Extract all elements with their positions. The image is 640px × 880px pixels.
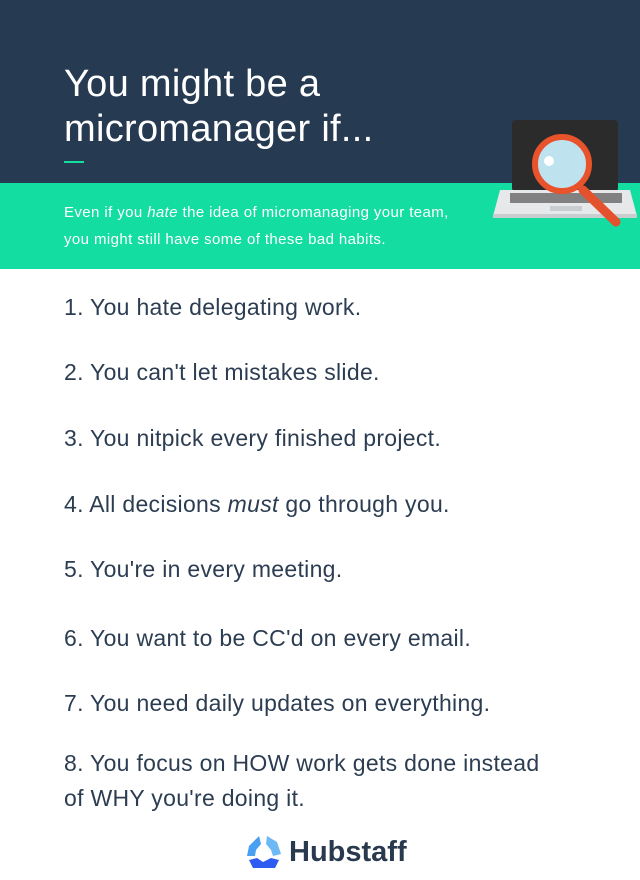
list item 8: of WHY you're doing it.: [64, 785, 305, 811]
list item 7: 7. You need daily updates on everything.: [64, 690, 490, 716]
icon: laptop with magnifier: [493, 120, 637, 226]
list item 8: [64, 750, 539, 811]
logo: Hubstaff: [247, 836, 407, 868]
list item 1: 1. You hate delegating work.: [64, 294, 361, 320]
green band: [0, 183, 640, 269]
list item 4: 4. All decisions must go through you.: [64, 491, 450, 517]
list item 6: 6. You want to be CC'd on every email.: [64, 625, 471, 651]
title: [64, 63, 374, 150]
subtitle: Even if you hate the idea of micromanaging your team,: [64, 204, 449, 221]
list item 3: 3. You nitpick every finished project.: [64, 425, 441, 451]
subtitle: [64, 204, 449, 248]
list item 8: 8. You focus on HOW work gets done instead: [64, 750, 539, 776]
list item 2: 2. You can't let mistakes slide.: [64, 359, 380, 385]
title underline accent: [64, 161, 84, 163]
title: You might be a: [64, 63, 320, 105]
subtitle: you might still have some of these bad habits.: [64, 231, 386, 248]
header dark band: [0, 0, 640, 183]
logo text: Hubstaff: [289, 836, 407, 868]
list item 5: 5. You're in every meeting.: [64, 556, 342, 582]
title: micromanager if...: [64, 108, 374, 150]
icon: hubstaff mark: [247, 836, 281, 868]
